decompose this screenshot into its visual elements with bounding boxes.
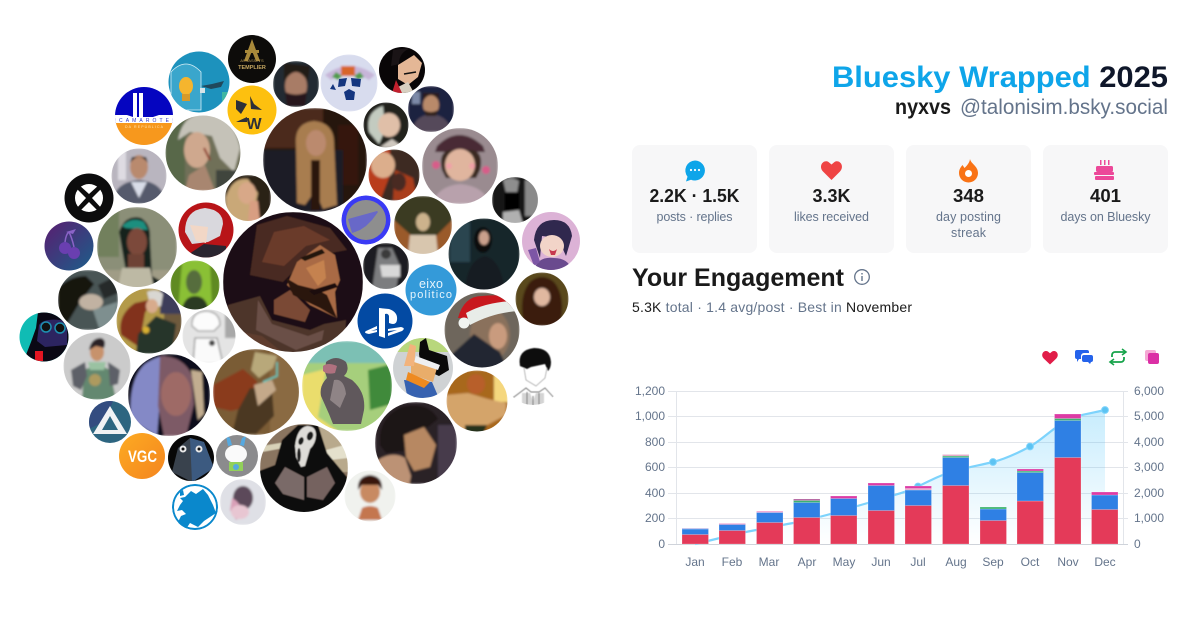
icon: cake bbox=[1094, 160, 1114, 180]
month labels: May bbox=[833, 555, 855, 569]
bar: Apr bbox=[794, 499, 820, 544]
stat card: posts and replies: posts · replies bbox=[656, 210, 732, 224]
avatar: camarote da republica bbox=[115, 87, 173, 147]
icon: legend quotes bbox=[1145, 350, 1159, 364]
avatar: windswept dark hair bbox=[58, 270, 118, 330]
avatar: gothic woman bbox=[448, 218, 520, 292]
icon: legend replies bbox=[1075, 350, 1093, 364]
left axis labels bbox=[635, 384, 665, 551]
stat card: days on Bluesky: days on Bluesky bbox=[1060, 210, 1151, 224]
month labels: Oct bbox=[1021, 555, 1040, 569]
stat card: day posting streak: 348 bbox=[953, 186, 984, 206]
avatar: pixel elf ranger bbox=[63, 332, 131, 400]
avatar bubble cluster bbox=[19, 35, 580, 530]
left axis labels: 0 bbox=[658, 537, 665, 551]
avatar: anime purple hair girl bbox=[522, 212, 580, 270]
avatar: stone moai bird bbox=[168, 435, 214, 482]
left axis labels: 1,200 bbox=[635, 384, 665, 398]
month labels: Dec bbox=[1094, 555, 1116, 569]
avatar: santa hat portrait bbox=[444, 292, 520, 370]
avatar: eixo politico: politico bbox=[410, 289, 452, 301]
avatar: man with beard in studio bbox=[408, 86, 454, 132]
avatar: pink portrait girl bbox=[422, 128, 498, 204]
avatar: penrose triangle bbox=[89, 401, 131, 443]
avatar: bird warrior painting bbox=[213, 349, 300, 435]
left axis labels: 200 bbox=[645, 511, 665, 525]
month labels: Feb bbox=[722, 555, 743, 569]
avatar: ghost logo bbox=[320, 54, 378, 112]
avatar: eixo politico bbox=[405, 264, 457, 316]
avatar: smiling man in suit bbox=[111, 148, 167, 204]
month labels: Aug bbox=[945, 555, 967, 569]
stat card: day posting streak: day posting bbox=[936, 210, 1001, 224]
stat card: days on Bluesky: 401 bbox=[1090, 186, 1121, 206]
avatar: templier bbox=[228, 35, 276, 83]
left axis labels: 600 bbox=[645, 460, 665, 474]
icon: heart bbox=[821, 161, 842, 180]
cumulative area bbox=[695, 410, 1105, 544]
avatar: purple hooded woman bbox=[128, 354, 210, 436]
bar: Jun bbox=[868, 483, 894, 544]
right axis labels: 5,000 bbox=[1134, 409, 1164, 423]
right axis labels: 0 bbox=[1134, 537, 1141, 551]
bar: May bbox=[830, 496, 857, 544]
avatar: laughing man bbox=[344, 470, 396, 522]
avatar: scream mask bbox=[259, 424, 348, 513]
month labels: Jan bbox=[685, 555, 705, 569]
avatar: green elf bbox=[170, 260, 220, 312]
stat card: day posting streak: streak bbox=[951, 226, 987, 240]
avatar: naruto salute bbox=[393, 338, 453, 400]
left axis labels: 1,000 bbox=[635, 409, 665, 423]
bar: Jan bbox=[682, 528, 708, 544]
stat card: likes received: 3.3K bbox=[812, 186, 850, 206]
bar: Oct bbox=[1017, 469, 1044, 544]
avatar: woman with two tone hair bbox=[363, 102, 409, 148]
bar: Aug bbox=[942, 454, 969, 544]
right axis labels: 1,000 bbox=[1134, 511, 1164, 525]
avatar: white-haired witcher bbox=[165, 114, 241, 192]
avatar: blue ring shower logo bbox=[342, 196, 390, 244]
avatar: bw manga sketch bbox=[182, 309, 237, 364]
avatar: europe map bbox=[172, 484, 218, 530]
stat card: likes received: likes received bbox=[794, 210, 869, 224]
avatar: xbox logo bbox=[64, 173, 114, 223]
engagement summary: 5.3K total · 1.4 avg/post · Best in November bbox=[632, 299, 912, 315]
bar: Sep bbox=[980, 507, 1006, 544]
stat card: days on Bluesky bbox=[1043, 145, 1168, 253]
avatar: eixo politico: eixo bbox=[419, 277, 443, 291]
stat card: likes received bbox=[769, 145, 894, 253]
avatar: bw sketch boy bbox=[512, 347, 554, 405]
chart grid bbox=[668, 391, 1128, 544]
avatar: white cat character bbox=[216, 435, 258, 477]
avatar: yellow w logo bbox=[227, 85, 277, 135]
avatar: templier: TEMPLIER bbox=[238, 65, 266, 71]
avatar: large bearded character portrait bbox=[223, 212, 363, 356]
avatar: curly haired man profile bbox=[375, 402, 457, 486]
bar: Nov bbox=[1054, 414, 1081, 544]
avatar: long blonde hair woman bbox=[263, 108, 367, 212]
user handle: @talonisim.bsky.social bbox=[960, 96, 1168, 119]
month labels: Nov bbox=[1057, 555, 1079, 569]
icon: flame bbox=[959, 159, 978, 182]
right axis labels bbox=[1134, 384, 1164, 551]
avatar: camarote da republica: CAMAROTE bbox=[119, 118, 170, 124]
bar: Dec bbox=[1092, 492, 1118, 544]
cumulative line bbox=[695, 407, 1108, 544]
avatar: grey vintage photo bbox=[363, 243, 409, 290]
bar: Feb bbox=[719, 524, 746, 544]
left axis labels: 800 bbox=[645, 435, 665, 449]
icon: info bbox=[855, 270, 869, 284]
month labels: Apr bbox=[798, 555, 816, 569]
left axis labels: 400 bbox=[645, 486, 665, 500]
month labels: Jun bbox=[871, 555, 891, 569]
stat card: day posting streak bbox=[906, 145, 1031, 253]
avatar: cartoon villain bbox=[379, 47, 425, 93]
stacked bars bbox=[682, 414, 1118, 544]
month labels: Jul bbox=[910, 555, 926, 569]
avatar: cartoon bear bbox=[302, 341, 392, 431]
stat card: posts and replies bbox=[632, 145, 757, 253]
right axis labels: 6,000 bbox=[1134, 384, 1164, 398]
stat card: posts and replies: 2.2K · 1.5K bbox=[650, 186, 740, 206]
avatar: yellow w logo: W bbox=[246, 116, 262, 133]
avatar: lightbulb in cage bbox=[168, 51, 230, 113]
avatar: vgc orange: VGC bbox=[128, 448, 157, 466]
avatar: playstation logo bbox=[357, 293, 413, 349]
icon: legend likes bbox=[1042, 351, 1058, 364]
avatar: blonde praying woman bbox=[225, 175, 271, 223]
avatar: shirtless man olive background bbox=[394, 196, 452, 255]
avatar: bearded man bbox=[273, 61, 319, 107]
month labels: Sep bbox=[982, 555, 1004, 569]
right axis labels: 4,000 bbox=[1134, 435, 1164, 449]
avatar: darth vader glasses bbox=[19, 312, 70, 364]
avatar: camarote da republica: DA REPÚBLICA bbox=[125, 125, 164, 129]
icon: legend reposts bbox=[1110, 349, 1126, 365]
chart: monthly engagement stacked bars with cumulative line bbox=[635, 384, 1164, 569]
avatar: vgc orange bbox=[119, 433, 165, 479]
avatar: purple cherries bbox=[44, 221, 94, 271]
avatar: green haired warrior bbox=[97, 207, 177, 292]
avatar: red abstract face bbox=[368, 149, 420, 201]
title: Bluesky Wrapped 2025: Bluesky Wrapped 2025 bbox=[832, 61, 1168, 94]
avatar: rogue comic bbox=[116, 288, 182, 354]
month labels bbox=[685, 555, 1116, 569]
month labels: Mar bbox=[759, 555, 779, 569]
avatar: phone selfie bw bbox=[492, 177, 539, 224]
avatar: templier: ASSASSIN'S bbox=[240, 58, 264, 63]
heading: Your Engagement: Your Engagement bbox=[632, 264, 845, 292]
avatar: warm light figure bbox=[446, 370, 508, 435]
avatar: silver haired anime on red bbox=[178, 202, 234, 260]
bar: Mar bbox=[756, 511, 783, 544]
user handle: nyxvs bbox=[895, 96, 951, 119]
avatar: hairy bearded smiling man bbox=[515, 272, 569, 326]
avatar: floral pink drawing bbox=[220, 479, 266, 525]
right axis labels: 2,000 bbox=[1134, 486, 1164, 500]
bar: Jul bbox=[905, 486, 932, 544]
icon: chat bubble bbox=[685, 160, 705, 182]
legend icons bbox=[1042, 349, 1159, 365]
right axis labels: 3,000 bbox=[1134, 460, 1164, 474]
